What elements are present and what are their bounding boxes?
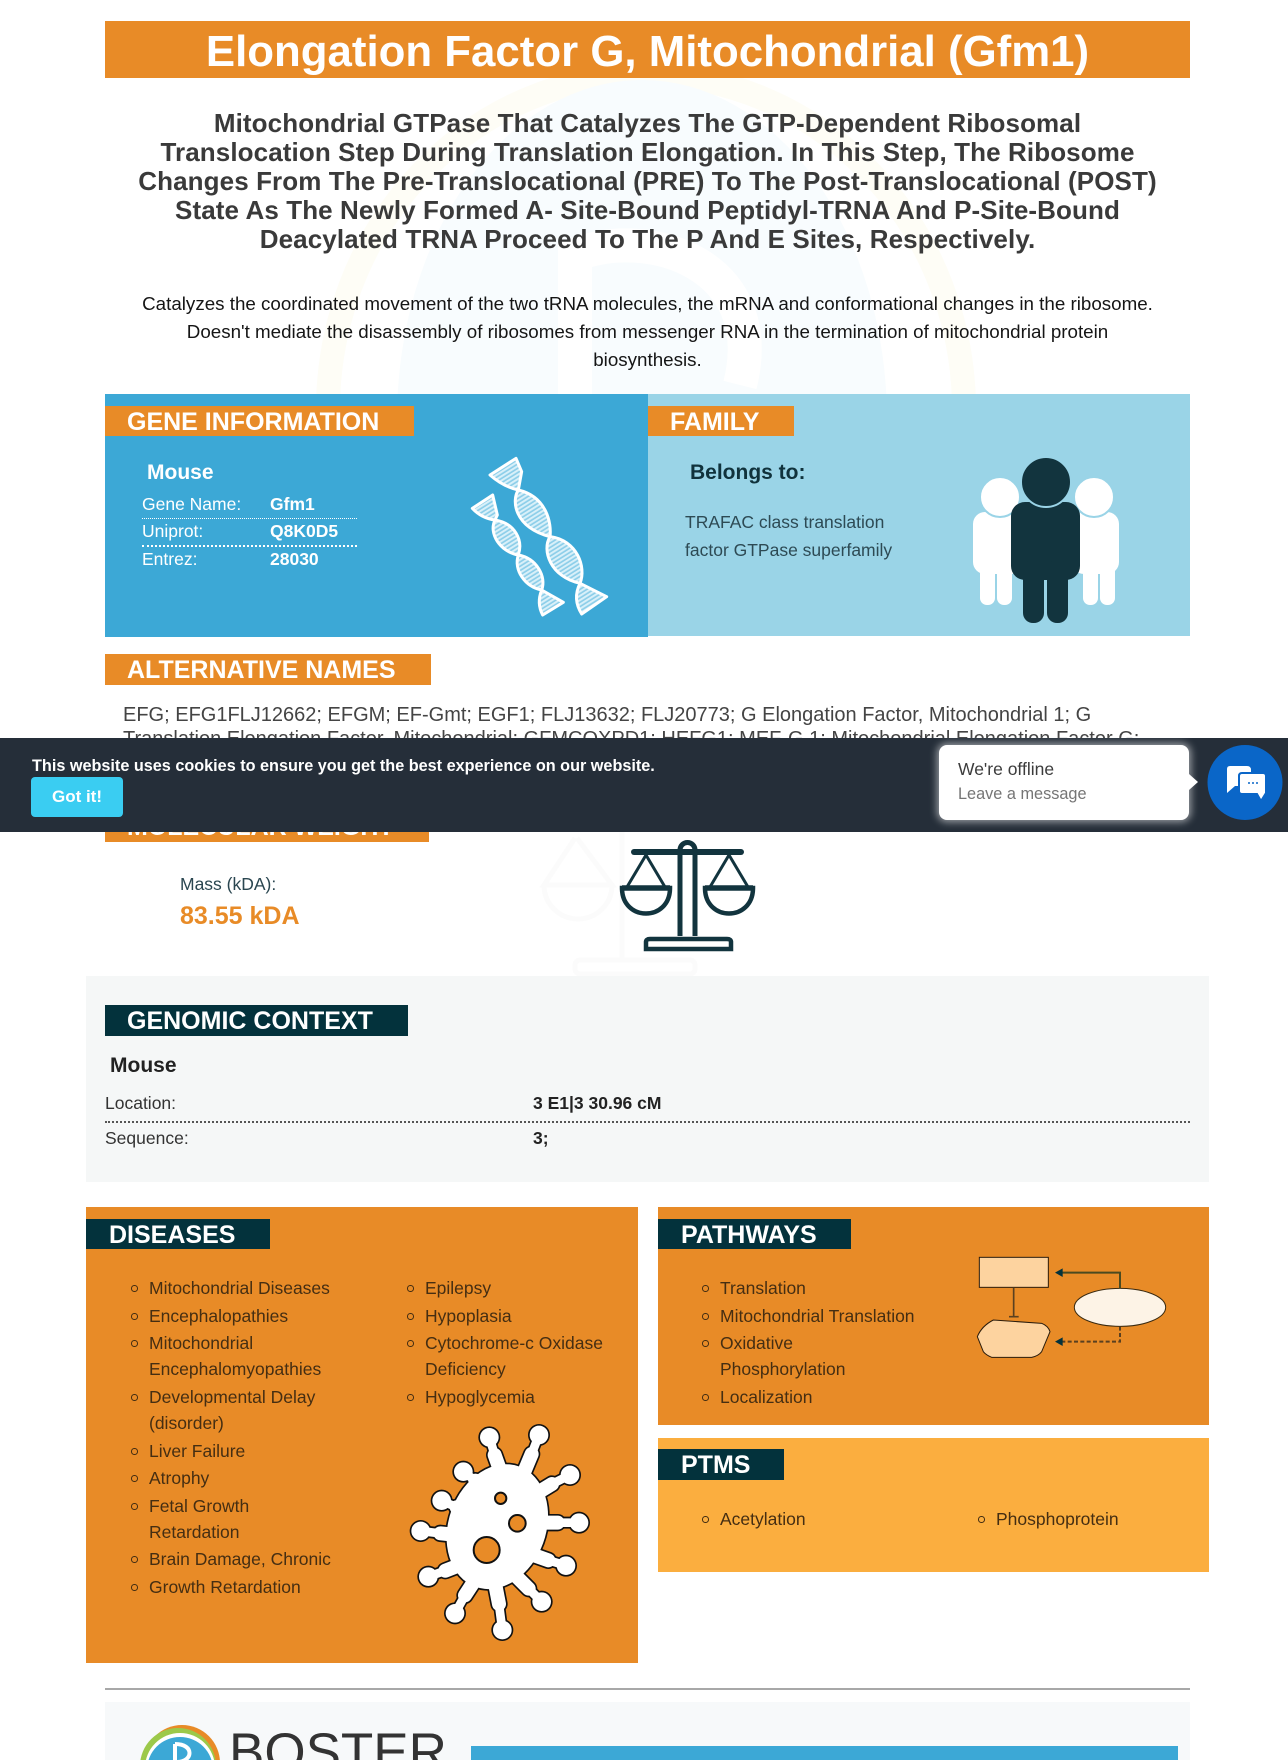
alternative names text: [123, 704, 1139, 750]
list: diseases column two: Epilepsy: [425, 1278, 491, 1298]
logo: Boster mark: [140, 1725, 220, 1760]
list: diseases column one: Developmental Delay: [149, 1387, 315, 1407]
panel: diseases: [86, 1207, 638, 1663]
list: diseases column one: Growth Retardation: [149, 1577, 301, 1597]
family description: [685, 512, 892, 560]
heading: family: FAMILY: [670, 408, 759, 436]
panel: gene information: [105, 394, 648, 637]
list: pathways: Oxidative: [720, 1333, 793, 1353]
species label: Mouse: [110, 1054, 177, 1077]
list: pathways: [702, 1278, 915, 1407]
belongs to label: Belongs to:: [690, 461, 806, 484]
heading: PTMs: PTMS: [681, 1451, 750, 1479]
subtitle heading: State As The Newly Formed A- Site-Bound Peptidyl-TRNA And P-Site-Bound: [175, 195, 1120, 225]
title banner: Elongation Factor G, Mitochondrial (Gfm1): [206, 27, 1089, 76]
list: diseases column one: Mitochondrial: [149, 1333, 253, 1353]
list: diseases column two: Deficiency: [425, 1359, 506, 1379]
panel: pathways: [658, 1207, 1209, 1425]
list: pathways: Translation: [720, 1278, 806, 1298]
list: diseases column one: (disorder): [149, 1413, 224, 1433]
heading: genomic context: GENOMIC CONTEXT: [127, 1007, 373, 1035]
icon: group of people: [973, 458, 1119, 623]
list: pathways: Localization: [720, 1387, 812, 1407]
mass value: 83.55 kDA: [180, 902, 300, 930]
icon: virus: [410, 1424, 590, 1641]
panel: PTMs: [658, 1438, 1209, 1572]
uniprot row: Uniprot:: [142, 521, 203, 541]
subtitle heading: Deacylated TRNA Proceed To The P And E Sites, Respectively.: [260, 224, 1035, 254]
entrez row: [142, 549, 319, 569]
subtitle heading: Mitochondrial GTPase That Catalyzes The GTP-Dependent Ribosomal: [214, 108, 1081, 138]
gene name row: Gfm1: [270, 494, 315, 514]
list: diseases column two: Cytochrome-c Oxidase: [425, 1333, 603, 1353]
family description: TRAFAC class translation: [685, 512, 884, 532]
subtitle heading: [138, 108, 1157, 254]
panel: genomic context: [86, 976, 1209, 1182]
list: diseases column two: Hypoplasia: [425, 1306, 512, 1326]
list: diseases column one: Fetal Growth: [149, 1496, 249, 1516]
uniprot row: [142, 517, 357, 547]
description paragraph: Doesn't mediate the disassembly of ribosomes from messenger RNA in the termination of mitochondrial protein: [187, 321, 1108, 342]
family description: factor GTPase superfamily: [685, 540, 892, 560]
heading: alternative names: ALTERNATIVE NAMES: [127, 656, 396, 684]
heading: pathways: PATHWAYS: [681, 1221, 817, 1249]
list: diseases column one: Brain Damage, Chronic: [149, 1549, 331, 1569]
subtitle heading: Changes From The Pre-Translocational (PRE) To The Post-Translocational (POST): [138, 166, 1157, 196]
location row: 3 E1|3 30.96 cM: [533, 1093, 661, 1113]
cookie button: Got it!: [52, 787, 102, 806]
heading: family: [648, 406, 794, 436]
list: diseases column one: Mitochondrial Diseases: [149, 1278, 330, 1298]
alternative names text: Translation Elongation Factor, Mitochondrial; GFMCOXPD1; HEFG1; MEF-G 1; Mitochondrial Elongation Factor G;: [123, 728, 1139, 750]
background ghost scale: [530, 832, 710, 982]
description paragraph: Catalyzes the coordinated movement of the two tRNA molecules, the mRNA and conformational changes in the ribosome.: [142, 293, 1153, 314]
panel: family: [648, 394, 1190, 636]
PTM item: phosphoprotein: Phosphoprotein: [996, 1509, 1119, 1529]
cookie message: This website uses cookies to ensure you get the best experience on our website.: [32, 757, 655, 775]
chat popup pointer: [1189, 774, 1198, 790]
description paragraph: biosynthesis.: [593, 349, 702, 370]
list: diseases column one: Encephalomyopathies: [149, 1359, 321, 1379]
icon: DNA helix: [470, 456, 608, 617]
species label: Mouse: [147, 461, 214, 484]
sequence row: 3;: [533, 1128, 549, 1148]
list: diseases column one: Retardation: [149, 1522, 239, 1542]
list: diseases column one: Atrophy: [149, 1468, 209, 1488]
heading: diseases: DISEASES: [109, 1221, 235, 1249]
location row: Location:: [105, 1093, 176, 1113]
footer divider: [105, 1688, 1190, 1690]
list: diseases column one: Encephalopathies: [149, 1306, 288, 1326]
list: diseases column two: Hypoglycemia: [425, 1387, 535, 1407]
sequence row: [105, 1128, 549, 1148]
heading: diseases: [86, 1219, 270, 1249]
heading: molecular weight: MOLECULAR WEIGHT: [127, 813, 394, 841]
chat status: We're offline: [958, 759, 1054, 779]
list: diseases column one: [131, 1278, 331, 1597]
list: pathways: Phosphorylation: [720, 1359, 846, 1379]
list: diseases column two: [407, 1278, 603, 1407]
chat popup: [939, 745, 1189, 820]
gene name row: [142, 490, 357, 519]
entrez row: 28030: [270, 549, 319, 569]
heading: PTMs: [658, 1449, 784, 1480]
entrez row: Entrez:: [142, 549, 197, 569]
cookie button: [31, 777, 123, 817]
PTM item: acetylation: Acetylation: [720, 1509, 806, 1529]
location row: [105, 1089, 1190, 1123]
list: diseases column one: Liver Failure: [149, 1441, 245, 1461]
heading: gene information: GENE INFORMATION: [127, 408, 379, 436]
chat launcher button: [1208, 745, 1282, 820]
chat prompt: Leave a message: [958, 785, 1087, 803]
panel: footer: [105, 1702, 1190, 1760]
list: pathways: Mitochondrial Translation: [720, 1306, 915, 1326]
footer blue banner: [471, 1746, 1178, 1760]
uniprot row: Q8K0D5: [270, 521, 338, 541]
subtitle heading: Translocation Step During Translation Elongation. In This Step, The Ribosome: [160, 137, 1135, 167]
mass label: Mass (kDA):: [180, 874, 276, 894]
alternative names text: EFG; EFG1FLJ12662; EFGM; EF-Gmt; EGF1; FLJ13632; FLJ20773; G Elongation Factor, Mitochondrial 1; G: [123, 704, 1091, 726]
icon: pathway diagram: [976, 1256, 1166, 1358]
description paragraph: [142, 293, 1153, 370]
gene name row: Gene Name:: [142, 494, 241, 514]
background watermark logo: [316, 78, 976, 394]
icon: balance scale: [620, 840, 756, 952]
sequence row: Sequence:: [105, 1128, 189, 1148]
title banner: [105, 21, 1190, 78]
cookie consent bar: [0, 738, 1288, 832]
heading: pathways: [658, 1219, 851, 1249]
